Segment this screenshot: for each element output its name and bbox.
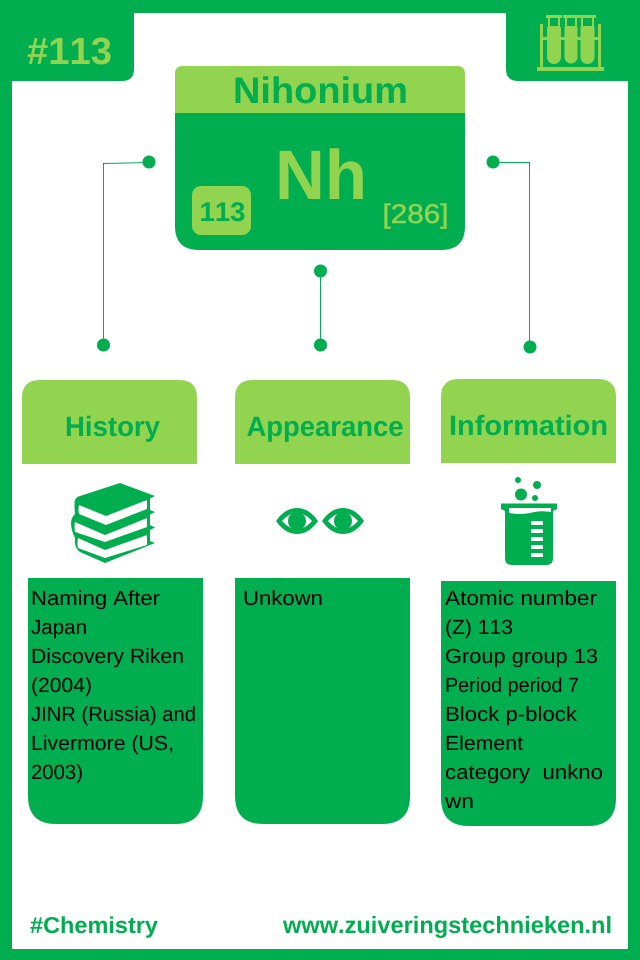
- history text: JINR (Russia) and: [31, 703, 196, 726]
- element name: Nihonium: [233, 70, 408, 111]
- icon: beaker: [501, 477, 557, 565]
- panel: history header: History: [65, 411, 160, 442]
- footer website: www.zuiveringstechnieken.nl: [282, 912, 612, 938]
- history text: 2003): [31, 761, 83, 784]
- history text: Japan: [31, 616, 87, 639]
- information text: [444, 587, 603, 813]
- information text: wn: [444, 790, 474, 813]
- footer hashtag: #Chemistry: [30, 912, 158, 938]
- badge: element number: [0, 0, 134, 81]
- panel: information header: [441, 379, 616, 463]
- history text: (2004): [31, 674, 92, 697]
- element card: [175, 66, 465, 250]
- information text: Atomic number: [445, 587, 597, 610]
- atomic mass: [286]: [382, 199, 448, 229]
- panel: information body: [441, 581, 616, 826]
- history text: Livermore (US,: [31, 732, 174, 755]
- connector: appearance: [314, 264, 327, 352]
- history text: [31, 587, 196, 784]
- badge: element number: #113: [27, 31, 112, 73]
- panel: information header: Information: [449, 410, 608, 441]
- card body: [175, 113, 465, 250]
- panel: history body: [28, 578, 203, 824]
- history text: Discovery Riken: [31, 645, 184, 668]
- information text: Group group 13: [445, 645, 598, 668]
- atomic number box: 113: [200, 197, 246, 227]
- information text: (Z) 113: [445, 616, 513, 639]
- badge: test tubes icon: [506, 0, 640, 81]
- icon: eyes: [276, 508, 364, 534]
- panel: appearance body: [235, 578, 410, 824]
- element symbol: Nh: [275, 136, 367, 214]
- connector: information: [486, 156, 536, 354]
- information text: Element: [445, 732, 523, 755]
- panel: appearance header: [235, 380, 410, 464]
- appearance text: Unkown: [243, 587, 323, 610]
- history text: Naming After: [31, 587, 160, 610]
- panel: appearance header: Appearance: [246, 411, 404, 442]
- information text: Block p-block: [445, 703, 578, 726]
- information text: Period period 7: [445, 674, 579, 697]
- icon: books: [71, 483, 155, 563]
- connector: history: [97, 156, 156, 352]
- atomic number box: [192, 186, 251, 235]
- card header: [175, 66, 465, 113]
- panel: history header: [22, 380, 197, 464]
- information text: category unkno: [445, 761, 603, 784]
